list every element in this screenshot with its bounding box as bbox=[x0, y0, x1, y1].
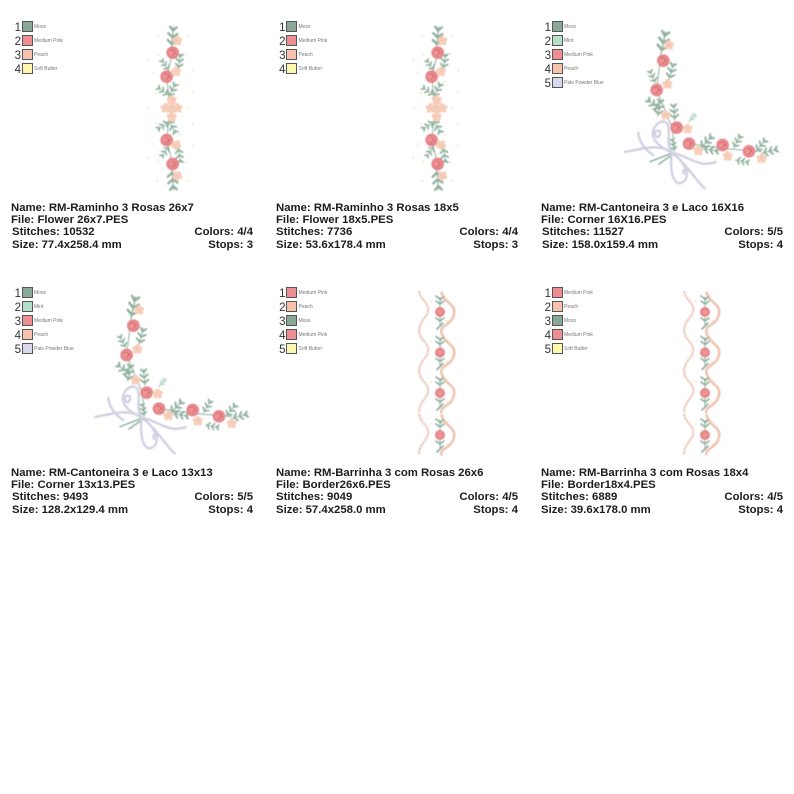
colour legend bbox=[545, 288, 593, 356]
colour legend: 4 bbox=[15, 64, 22, 76]
colour legend: Peach bbox=[34, 52, 48, 58]
design details: Stops: 4 bbox=[473, 504, 519, 516]
colour legend: Medium Pink bbox=[298, 332, 328, 338]
design details: Colors: 4/5 bbox=[724, 491, 783, 503]
colour legend: 1 bbox=[279, 288, 286, 300]
colour legend: Peach bbox=[564, 304, 578, 310]
colour legend: Moss bbox=[34, 290, 46, 296]
design details: File: Border26x6.PES bbox=[276, 479, 391, 491]
design details: Size: 39.6x178.0 mm bbox=[541, 504, 651, 516]
embroidery: rose corner with bow bbox=[95, 295, 249, 454]
design details: Size: 57.4x258.0 mm bbox=[276, 504, 386, 516]
design details: Colors: 5/5 bbox=[724, 226, 783, 238]
design details: Colors: 4/5 bbox=[459, 491, 518, 503]
colour legend: Soft Butter bbox=[564, 346, 588, 352]
colour legend: Peach bbox=[34, 332, 48, 338]
design details: File: Corner 16X16.PES bbox=[541, 214, 667, 226]
design details: Stops: 4 bbox=[738, 504, 784, 516]
design details bbox=[11, 202, 254, 251]
colour legend: Soft Butter bbox=[298, 66, 322, 72]
design details: Size: 77.4x258.4 mm bbox=[12, 239, 122, 251]
colour legend: 5 bbox=[545, 344, 551, 356]
panel: RM-Raminho 3 Rosas 18x5 bbox=[276, 22, 519, 251]
panel: RM-Cantoneira 3 e Laco 13x13 bbox=[11, 288, 254, 516]
colour legend: 4 bbox=[279, 330, 286, 342]
colour legend: Peach bbox=[564, 66, 578, 72]
colour legend: 1 bbox=[545, 22, 551, 34]
design details bbox=[276, 467, 519, 516]
design details: Stops: 4 bbox=[738, 239, 784, 251]
colour legend: 2 bbox=[545, 36, 551, 48]
colour legend: 1 bbox=[545, 288, 551, 300]
colour legend: 5 bbox=[279, 344, 286, 356]
colour legend bbox=[15, 288, 74, 356]
panel: RM-Barrinha 3 com Rosas 26x6 bbox=[276, 288, 519, 516]
colour legend: 5 bbox=[545, 78, 551, 90]
colour legend: Medium Pink bbox=[564, 290, 593, 296]
colour legend: 2 bbox=[15, 36, 21, 48]
colour legend: Medium Pink bbox=[34, 38, 63, 44]
embroidery: scalloped rose border bbox=[684, 291, 719, 456]
colour legend: 3 bbox=[279, 50, 286, 62]
design details bbox=[541, 202, 784, 251]
colour legend: Medium Pink bbox=[298, 290, 328, 296]
design details: Colors: 4/4 bbox=[194, 226, 254, 238]
colour legend: 2 bbox=[545, 302, 551, 314]
embroidery: floral column bbox=[147, 26, 194, 190]
panel: RM-Raminho 3 Rosas 26x7 bbox=[11, 22, 254, 251]
colour legend bbox=[545, 22, 604, 90]
design details: Stitches: 7736 bbox=[276, 226, 352, 238]
embroidery: floral column bbox=[412, 26, 459, 190]
colour legend: Medium Pink bbox=[564, 52, 593, 58]
design details: Colors: 5/5 bbox=[194, 491, 253, 503]
colour legend: 2 bbox=[15, 302, 21, 314]
colour legend: Moss bbox=[564, 318, 576, 324]
colour legend: Moss bbox=[564, 24, 576, 30]
colour legend: 1 bbox=[279, 22, 286, 34]
colour legend: Moss bbox=[34, 24, 46, 30]
design details: Name: RM-Barrinha 3 com Rosas 26x6 bbox=[276, 467, 483, 479]
colour legend: Medium Pink bbox=[34, 318, 63, 324]
colour legend: 3 bbox=[15, 50, 21, 62]
design details: Name: RM-Cantoneira 3 e Laco 16X16 bbox=[541, 202, 744, 214]
colour legend: Mint bbox=[564, 38, 574, 44]
design details: Size: 128.2x129.4 mm bbox=[12, 504, 128, 516]
colour legend: Moss bbox=[298, 318, 311, 324]
colour legend: 5 bbox=[15, 344, 21, 356]
colour legend bbox=[279, 288, 328, 356]
colour legend: 1 bbox=[15, 22, 21, 34]
colour legend: Soft Butter bbox=[298, 346, 322, 352]
design details: Size: 158.0x159.4 mm bbox=[542, 239, 658, 251]
colour legend: Peach bbox=[298, 52, 313, 58]
embroidery: rose corner with bow bbox=[625, 30, 779, 189]
colour legend: 1 bbox=[15, 288, 21, 300]
design details bbox=[11, 467, 254, 516]
panel: RM-Cantoneira 3 e Laco 16X16 bbox=[541, 22, 784, 251]
colour legend bbox=[15, 22, 63, 76]
colour legend: Mint bbox=[34, 304, 44, 310]
design details: File: Corner 13x13.PES bbox=[11, 479, 136, 491]
design details: Name: RM-Barrinha 3 com Rosas 18x4 bbox=[541, 467, 749, 479]
colour legend: 3 bbox=[545, 316, 551, 328]
colour legend: Medium Pink bbox=[298, 38, 328, 44]
colour legend: 4 bbox=[545, 330, 552, 342]
colour legend: Pale Powder Blue bbox=[34, 346, 74, 352]
design details: File: Flower 18x5.PES bbox=[276, 214, 394, 226]
colour legend: 3 bbox=[545, 50, 551, 62]
design details: Stitches: 6889 bbox=[541, 491, 617, 503]
design details: Colors: 4/4 bbox=[459, 226, 519, 238]
colour legend: 4 bbox=[279, 64, 286, 76]
colour legend: 4 bbox=[545, 64, 552, 76]
colour legend: Moss bbox=[298, 24, 311, 30]
panel: RM-Barrinha 3 com Rosas 18x4 bbox=[541, 288, 784, 516]
colour legend: Pale Powder Blue bbox=[564, 80, 604, 86]
colour legend: Soft Butter bbox=[34, 66, 58, 72]
design details: Stops: 3 bbox=[473, 239, 518, 251]
design details: Stitches: 9493 bbox=[12, 491, 88, 503]
colour legend: Medium Pink bbox=[564, 332, 593, 338]
design details: Name: RM-Raminho 3 Rosas 18x5 bbox=[276, 202, 459, 214]
design details: Name: RM-Cantoneira 3 e Laco 13x13 bbox=[11, 467, 213, 479]
embroidery: scalloped rose border bbox=[419, 291, 454, 456]
design details: Stitches: 9049 bbox=[276, 491, 352, 503]
colour legend: 4 bbox=[15, 330, 22, 342]
colour legend bbox=[279, 22, 328, 76]
colour legend: 3 bbox=[279, 316, 286, 328]
design details: Size: 53.6x178.4 mm bbox=[276, 239, 386, 251]
colour legend: 3 bbox=[15, 316, 21, 328]
design details bbox=[276, 202, 519, 251]
colour legend: 2 bbox=[279, 302, 286, 314]
design details: Stops: 3 bbox=[208, 239, 253, 251]
design details bbox=[541, 467, 784, 516]
colour legend: 2 bbox=[279, 36, 286, 48]
design details: Stops: 4 bbox=[208, 504, 254, 516]
design details: Stitches: 11527 bbox=[542, 226, 624, 238]
colour legend: Peach bbox=[298, 304, 313, 310]
design details: File: Flower 26x7.PES bbox=[11, 214, 129, 226]
design details: Name: RM-Raminho 3 Rosas 26x7 bbox=[11, 202, 194, 214]
design details: File: Border18x4.PES bbox=[541, 479, 656, 491]
design details: Stitches: 10532 bbox=[12, 226, 95, 238]
